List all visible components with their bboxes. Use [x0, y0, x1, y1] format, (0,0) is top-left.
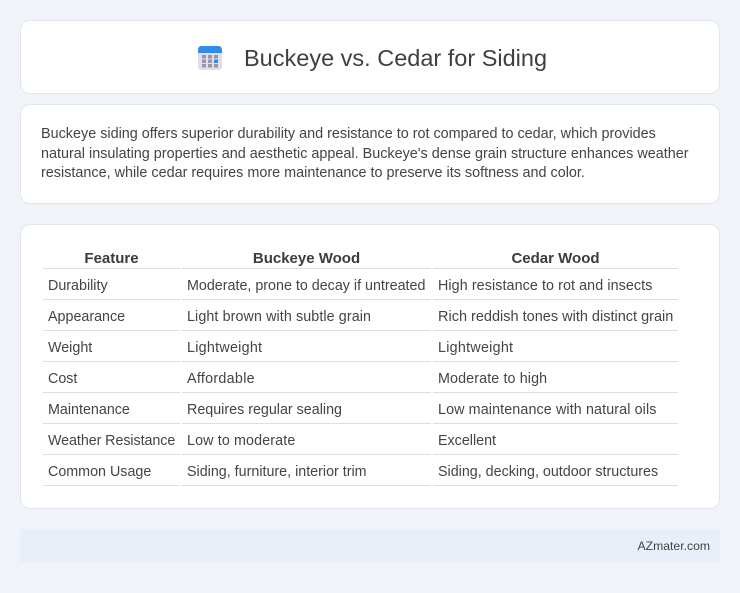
row: Maintenance: Low maintenance with natural oils	[438, 402, 657, 418]
row: Cost: Affordable	[187, 371, 255, 387]
row: Weather Resistance: Low to moderate	[187, 433, 295, 449]
row: Appearance: Light brown with subtle grain	[187, 309, 371, 325]
header: Cedar Wood: Cedar Wood	[511, 250, 600, 267]
row: Weight: Weight	[48, 340, 92, 356]
row: Cost	[48, 371, 547, 387]
row: Weather Resistance	[48, 433, 496, 449]
row: Maintenance	[48, 402, 657, 418]
row: Appearance: Rich reddish tones with distinct grain	[438, 309, 673, 325]
summary text: Buckeye siding offers superior durability and resistance to rot compared to cedar, which provides	[41, 126, 656, 142]
row: Maintenance: Maintenance	[48, 402, 130, 418]
icon: calendar	[198, 46, 222, 70]
panel: comparison table card	[20, 224, 720, 509]
row: Durability: Moderate, prone to decay if untreated	[187, 278, 425, 294]
summary text	[41, 126, 689, 181]
row: Durability: High resistance to rot and insects	[438, 278, 652, 294]
row: Common Usage: Common Usage	[48, 464, 151, 480]
row: Weight: Lightweight	[187, 340, 262, 356]
row: Common Usage: Siding, decking, outdoor structures	[438, 464, 658, 480]
row: Common Usage	[48, 464, 658, 480]
summary text: resistance, while cedar requires more maintenance to preserve its softness and color.	[41, 165, 585, 181]
row: Cost: Moderate to high	[438, 371, 547, 387]
row: Durability: Durability	[48, 278, 108, 294]
row: Maintenance: Requires regular sealing	[187, 402, 342, 418]
header: Feature: Feature	[84, 250, 139, 267]
row: Appearance	[48, 309, 673, 325]
row: Durability	[48, 278, 652, 294]
row: Weight: Lightweight	[438, 340, 513, 356]
row: Weather Resistance: Weather Resistance	[48, 433, 175, 449]
row: Cost: Cost	[48, 371, 77, 387]
row: Weight	[48, 340, 513, 356]
panel: title card	[20, 20, 720, 94]
title: Buckeye vs. Cedar for Siding	[244, 45, 547, 71]
comparison table	[43, 250, 678, 486]
footer text: AZmater.com: AZmater.com	[638, 539, 710, 553]
panel: summary card	[20, 104, 720, 204]
row: Common Usage: Siding, furniture, interior trim	[187, 464, 367, 480]
row: Weather Resistance: Excellent	[438, 433, 496, 449]
header: Buckeye Wood: Buckeye Wood	[253, 250, 360, 267]
row: Appearance: Appearance	[48, 309, 125, 325]
footer bar	[20, 529, 720, 562]
summary text: natural insulating properties and aesthetic appeal. Buckeye's dense grain structure enhances weather	[41, 146, 689, 162]
